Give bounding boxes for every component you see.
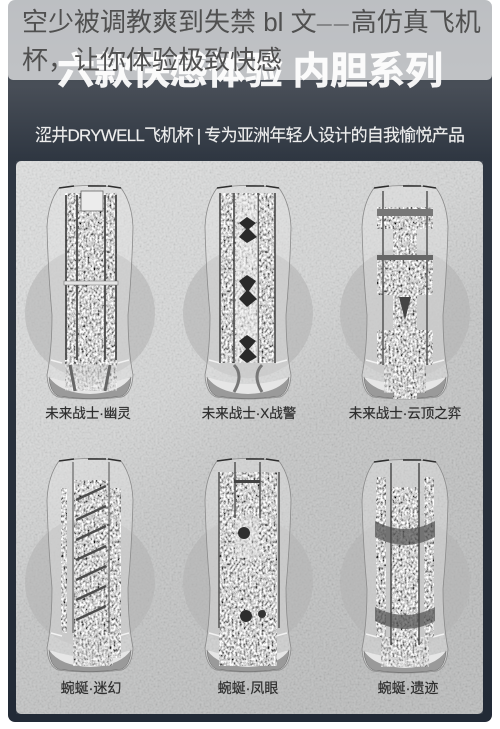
product panel	[16, 161, 483, 714]
main title: 六款快感体验 内胆系列	[57, 51, 443, 93]
overlay headline: 空少被调教爽到失禁 bl 文	[22, 7, 317, 37]
overlay headline	[22, 7, 481, 75]
overlay headline: 高仿真飞机	[351, 7, 481, 37]
circles behind products	[25, 248, 470, 647]
label row 1: 未来战士·云顶之弈	[349, 406, 461, 421]
label row 1: 未来战士·X战警	[202, 406, 296, 421]
product: 云顶之弈	[362, 186, 448, 399]
subtitle: 涩井DRYWELL飞机杯 | 专为亚洲年轻人设计的自我愉悦产品	[35, 126, 465, 145]
label row 2: 蜿蜒·迷幻	[61, 680, 121, 696]
product: 幽灵	[47, 186, 133, 399]
label row 2	[61, 680, 438, 696]
label row 1	[45, 406, 461, 421]
label row 1: 未来战士·幽灵	[45, 406, 131, 421]
product: 遗迹	[362, 460, 448, 673]
label row 2: 蜿蜒·凤眼	[218, 680, 278, 696]
translucent top band	[8, 0, 492, 80]
overlay headline: 杯，让你体验极致快感	[22, 45, 282, 75]
product: 凤眼	[205, 458, 291, 672]
label row 2: 蜿蜒·遗迹	[378, 680, 438, 696]
product: X战警	[205, 186, 291, 399]
overlay headline: ——	[317, 16, 351, 33]
product: 迷幻	[47, 458, 133, 672]
